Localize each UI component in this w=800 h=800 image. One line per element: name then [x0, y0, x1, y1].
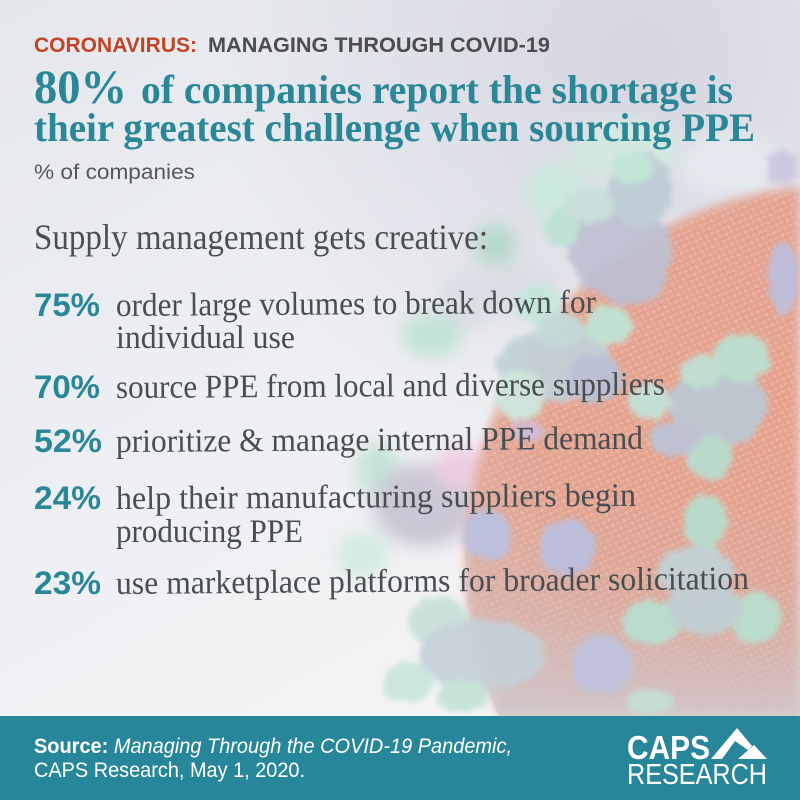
CAPS Research logo: CAPS [627, 729, 710, 766]
kicker heading: MANAGING THROUGH COVID-19 [208, 34, 550, 57]
blue clusters [463, 509, 511, 561]
blurred background spikes [336, 118, 780, 579]
list item: 52%: prioritize & manage internal PPE demand [116, 421, 644, 460]
list item: 75%: 75% [34, 287, 100, 323]
right spike [670, 363, 766, 447]
right purple spikes [768, 242, 798, 314]
list item: 24%: producing PPE [116, 514, 303, 550]
list item: 75% [34, 285, 596, 356]
list item: 75%: individual use [116, 320, 295, 356]
title [34, 61, 755, 150]
lower right spike [683, 494, 727, 550]
list item: 70%: 70% [34, 369, 100, 405]
list item: 24% [34, 478, 636, 550]
source note: Source: Managing Through the COVID-19 Pandemic, [34, 735, 512, 758]
title: 80% [34, 61, 127, 114]
top spike [568, 202, 672, 298]
list item: 24%: help their manufacturing suppliers begin [116, 478, 636, 517]
kicker heading [34, 34, 550, 57]
subtitle: % of companies [34, 161, 195, 184]
virus illustration [336, 118, 800, 716]
footer band [0, 716, 800, 800]
bottom spike [408, 596, 468, 648]
title: of companies report the shortage is [141, 67, 733, 112]
title: their greatest challenge when sourcing PPE [34, 105, 755, 150]
list item: 52%: 52% [34, 423, 102, 459]
list item: 70%: source PPE from local and diverse suppliers [116, 367, 665, 406]
CAPS Research logo [627, 728, 767, 791]
CAPS Research logo: RESEARCH [627, 759, 767, 791]
list item: 75%: order large volumes to break down for [116, 285, 596, 324]
list item: 23%: use marketplace platforms for broader solicitation [116, 561, 749, 602]
list item: 23%: 23% [34, 565, 101, 601]
middle spike [497, 329, 613, 401]
kicker heading: CORONAVIRUS: [34, 34, 197, 57]
section heading: Supply management gets creative: [34, 217, 488, 257]
source note: CAPS Research, May 1, 2020. [34, 759, 305, 782]
spikes [382, 150, 798, 714]
source note [34, 735, 512, 782]
list item: 24%: 24% [34, 480, 101, 516]
sphere body [465, 187, 800, 716]
